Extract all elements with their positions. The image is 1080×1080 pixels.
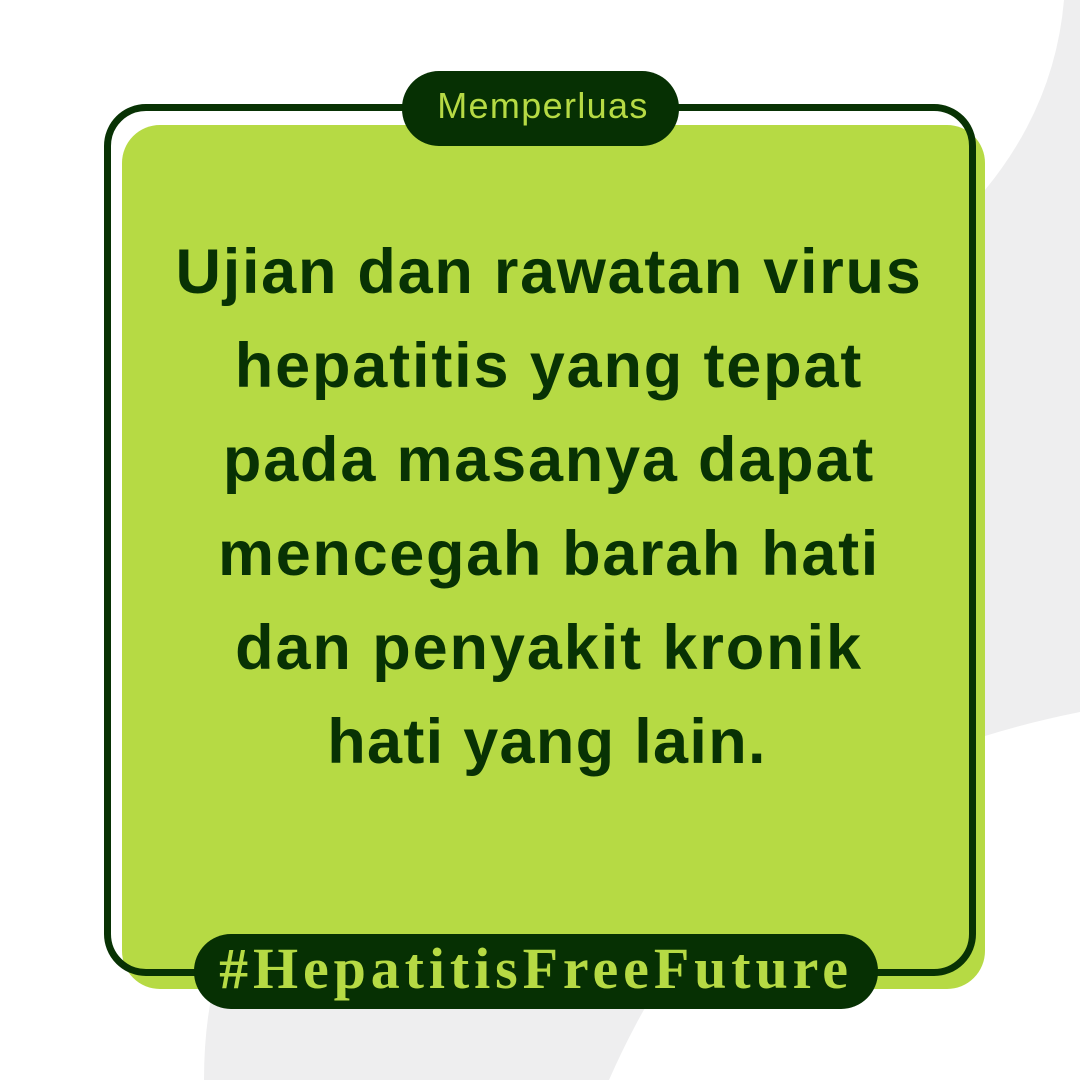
panel: green card	[122, 125, 985, 989]
main message text: dan penyakit kronik	[235, 613, 863, 683]
hashtag pill: #HepatitisFreeFuture	[219, 936, 853, 1001]
heading tag: Memperluas: Memperluas	[437, 85, 649, 126]
main message text: Ujian dan rawatan virus	[175, 237, 922, 307]
main message text: hepatitis yang tepat	[235, 331, 863, 401]
main message text: mencegah barah hati	[218, 519, 880, 589]
main message text	[175, 237, 922, 777]
main message text: pada masanya dapat	[223, 425, 875, 495]
panel outline frame	[104, 104, 976, 976]
heading tag: Memperluas	[402, 71, 679, 146]
main message text: hati yang lain.	[327, 707, 767, 777]
